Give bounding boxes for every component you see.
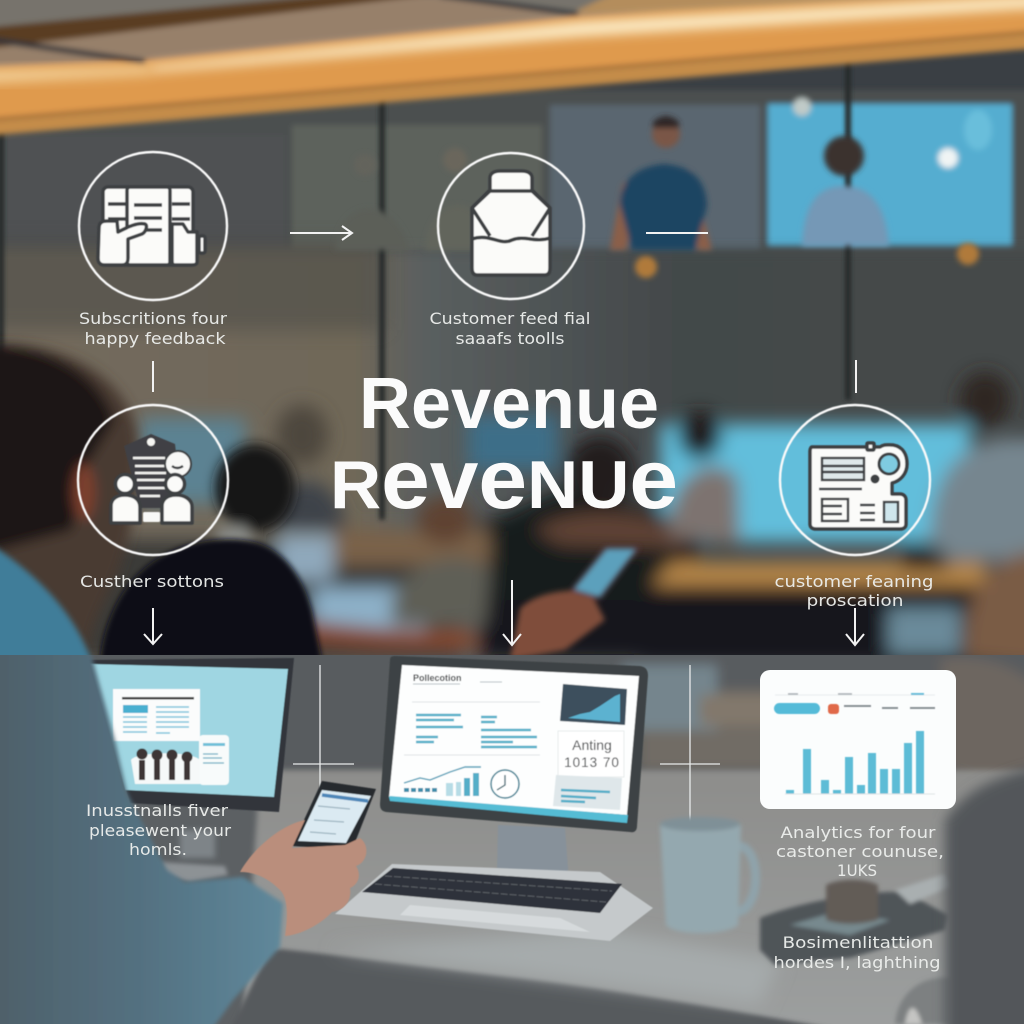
- upper windows: [0, 90, 1024, 260]
- label: customer feed: Customer feed fial: [430, 309, 590, 328]
- icon circle: customer feed envelope: [438, 153, 584, 299]
- caption: analytics: Analytics for four: [780, 823, 936, 842]
- title: Revenue: [359, 364, 659, 444]
- caption: installs: Inusstnalls fiver: [86, 801, 228, 820]
- coffee mug: [660, 817, 756, 933]
- right foreground figure: [945, 760, 1024, 1024]
- icon circle: subscriptions documents: [79, 152, 227, 300]
- analytics card: [760, 670, 956, 809]
- label: customer learning: [774, 572, 934, 610]
- monitor dashboard: Pollecotion: [413, 673, 462, 683]
- desk phone: [160, 862, 228, 882]
- device stack: [760, 874, 952, 1024]
- mullions: [1, 48, 848, 520]
- label: subscriptions: [79, 309, 227, 348]
- caption: implementation: Bosimenlitattion: [782, 933, 934, 952]
- caption: implementation: [774, 933, 940, 972]
- title: [330, 364, 678, 526]
- caption: implementation: hordes I, laghthing: [774, 953, 940, 972]
- connector arrows and lines: [144, 226, 864, 822]
- label: subscriptions: happy feedback: [84, 329, 226, 348]
- laptop with document and team: [86, 658, 294, 812]
- mid navy shirt: [215, 444, 295, 560]
- label: subscriptions: Subscritions four: [79, 309, 227, 328]
- caption: installs: pleasewent your: [89, 821, 231, 840]
- label: customer learning: proscation: [806, 591, 904, 610]
- phone and hand: [240, 781, 376, 936]
- crowd: [85, 363, 1024, 655]
- lower wall: [0, 250, 1024, 670]
- icon circle: customer solutions team: [78, 405, 228, 555]
- label: customer learning: customer feaning: [774, 572, 934, 591]
- monitor dashboard: 1013 70: [564, 755, 620, 770]
- caption: analytics: castoner counuse,: [776, 842, 944, 861]
- label: customer solutions: Custher sottons: [80, 572, 224, 591]
- caption: installs: homls.: [129, 840, 187, 859]
- monitor dashboard: [380, 656, 648, 878]
- foreground shirt: [0, 650, 283, 1024]
- label: customer feed: [430, 309, 590, 348]
- figures on wall screens: [335, 116, 889, 250]
- laptop keyboard: [335, 864, 653, 941]
- icon circle: customer learning dashboard: [780, 405, 930, 555]
- bottom desk zone: [0, 655, 1024, 1024]
- caption: installs: [86, 801, 231, 859]
- monitor dashboard: Anting: [572, 737, 612, 753]
- label: customer feed: saaafs toolls: [456, 329, 564, 348]
- title: ReveNUe: [330, 432, 678, 526]
- left foreground man: [0, 343, 138, 660]
- caption: analytics: [776, 823, 944, 880]
- caption: analytics: 1UKS: [837, 861, 877, 880]
- ceiling: [0, 0, 1024, 138]
